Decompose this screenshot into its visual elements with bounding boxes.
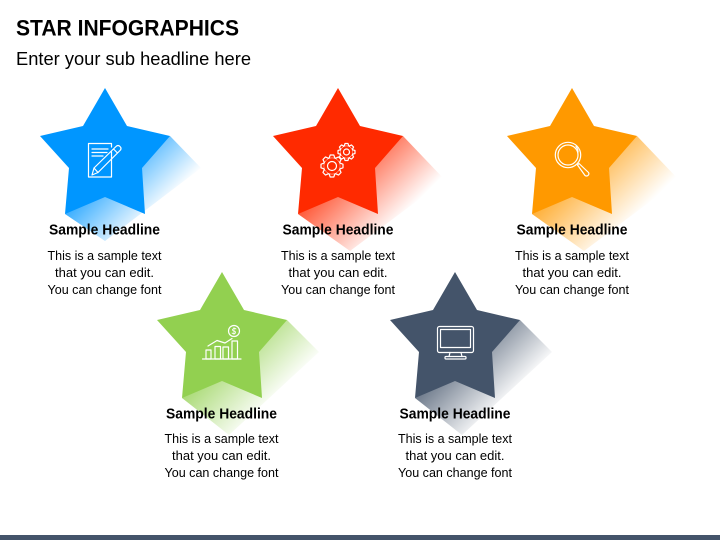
body text: that you can edit.: [522, 265, 622, 280]
headline: Sample Headline: [166, 406, 277, 422]
icon: growth chart with dollar: [202, 326, 241, 359]
body text: This is a sample text: [515, 248, 629, 263]
body text: You can change font: [164, 465, 279, 480]
body text: This is a sample text: [164, 431, 279, 446]
star: green: [157, 272, 287, 398]
body text: You can change font: [398, 465, 512, 480]
headline: Sample Headline: [49, 222, 160, 238]
icon: monitor: [438, 326, 474, 359]
star: red: [273, 88, 403, 214]
body text: that you can edit.: [288, 265, 388, 280]
star: blue: [40, 88, 170, 214]
body text: [398, 431, 512, 480]
body text: You can change font: [281, 282, 395, 297]
body text: that you can edit.: [55, 265, 154, 280]
star: orange: [507, 88, 637, 214]
panel: red star gears: [273, 88, 445, 297]
long shadow: orange: [532, 136, 679, 251]
body text: [281, 248, 395, 297]
panel: green star chart: [157, 272, 319, 480]
headline: Sample Headline: [516, 222, 628, 238]
footer bar: [0, 535, 720, 540]
title: STAR INFOGRAPHICS: [16, 16, 239, 40]
long shadow: green: [182, 320, 319, 435]
panel: blue star document: [40, 88, 201, 297]
body text: This is a sample text: [398, 431, 512, 446]
body text: You can change font: [515, 282, 629, 297]
long shadow: navy: [415, 320, 552, 435]
body text: that you can edit.: [172, 448, 271, 463]
subtitle: Enter your sub headline here: [16, 49, 251, 69]
icon: gears: [321, 144, 355, 177]
icon: document and pencil: [88, 144, 121, 177]
star: navy: [390, 272, 520, 398]
headline: Sample Headline: [282, 222, 394, 238]
long shadow: blue: [65, 136, 201, 241]
body text: that you can edit.: [406, 448, 504, 463]
icon: magnifying glass: [555, 142, 589, 176]
panel: navy star monitor: [390, 272, 552, 480]
body text: [164, 431, 279, 480]
headline: Sample Headline: [400, 406, 510, 422]
body text: [515, 248, 629, 297]
body text: [48, 248, 162, 297]
body text: This is a sample text: [48, 248, 162, 263]
body text: You can change font: [48, 282, 162, 297]
long shadow: red: [298, 136, 445, 251]
panel: orange star magnifier: [507, 88, 679, 297]
body text: This is a sample text: [281, 248, 395, 263]
